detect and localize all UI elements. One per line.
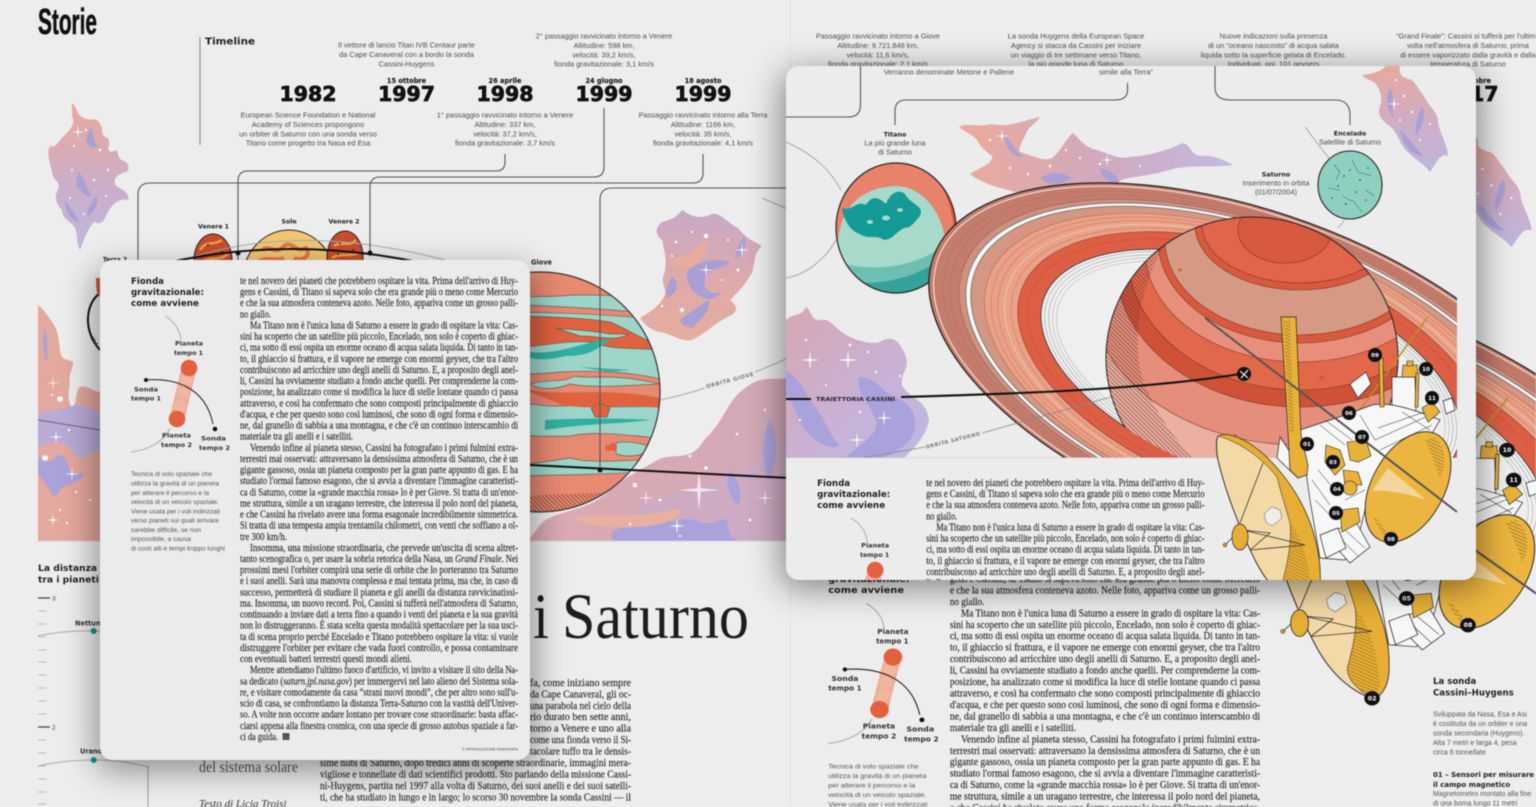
numbered markers: [1298, 348, 1439, 617]
article body text: gigante gassoso, ossia un pianeta composto per la gran parte appunto di gas. E ha: [240, 465, 518, 476]
panel: card 1 article: [100, 260, 530, 760]
panel: right magazine page: [790, 0, 1536, 807]
article body text: materiale tra gli anelli e i satelliti.: [240, 432, 353, 443]
sidebar: gravity assist: [131, 277, 230, 552]
article intro column: vigliose e tonnellate di dati scientifici prodotti. Sto parlando della missione Cassi-: [320, 770, 631, 780]
trajectory Cassini: [786, 367, 1251, 403]
distance scale: 3: [52, 596, 56, 602]
timeline captions right page: di essere vaporizzato dalla gravità e dalla: [1400, 50, 1536, 60]
article body text: e che Cassini ha rivelato avere una forma esagonale incredibilmente simmetrica.: [240, 510, 518, 520]
article body text: ci, ma sotto di essi ospita un enorme oceano di acqua salata liquida. Di tanto in tan-: [240, 343, 518, 354]
article intro column: tacolare tuffo tra le densis-: [530, 746, 631, 758]
sidebar paragraph: utilizza la gravità di un pianeta: [131, 480, 220, 488]
sidebar paragraph: sarebbe difficile, se non: [131, 527, 202, 534]
timeline captions bottom row: Academy of Sciences propongono: [252, 120, 364, 129]
timeline captions top row: da Cape Canaveral con a bordo la sonda: [339, 50, 475, 59]
numbered markers: 02: [1301, 608, 1309, 614]
shadow of card 1: [96, 270, 534, 770]
article body text: continuando a inviare dati a terra fino a quando i venti del pianeta e la sua gravità: [240, 610, 518, 621]
distance scale: Urano: [80, 748, 103, 756]
diagram: flyby: Sonda: [201, 434, 226, 442]
timeline captions right page: un viaggio di tre settimane verso Titano,: [1011, 50, 1141, 60]
sidebar: La sonda Cassini-Huygens: è costituita da un orbiter e una: [1433, 721, 1527, 728]
timeline captions right page: velocità: 11,6 km/s,: [847, 50, 909, 60]
dish left: [1216, 435, 1320, 610]
timeline captions right page: “Grand Finale”: Cassini si tufferà per l'ultima: [1396, 32, 1536, 40]
timeline captions bottom row: Altitudine: 1166 km,: [671, 120, 735, 129]
timeline captions top row: Cassini-Huygens: [379, 60, 435, 68]
timeline captions bottom row: fionda gravitazionale: 3,7 km/s: [455, 138, 555, 148]
numbered markers: 03: [1329, 460, 1337, 466]
diagram: flyby: tempo 1: [174, 349, 203, 357]
article body text: to, il ghiaccio si frattura, e il vapore ne emerge con enormi geyser, che tra l'altro: [240, 354, 518, 365]
sidebar heading: [131, 277, 204, 309]
article body text: attraverso, e così ha confermato che sono composti principalmente di ghiaccio: [240, 398, 518, 409]
timeline dates: 15 ottobre: [387, 77, 427, 85]
labels Titano, Encelado, Saturno: di Saturno: [878, 148, 912, 156]
gold parts of the spacecraft: [1325, 358, 1440, 532]
spacecraft Cassini-Huygens: [1205, 317, 1469, 617]
article body text: li, Cassini ha ovviamente studiato a fondo anche quelli. Per comprenderne la com-: [240, 376, 518, 387]
sidebar paragraph: per alterare il percorso e la: [131, 490, 210, 497]
planet: Sole: [246, 228, 328, 261]
sidebar heading: gravitazionale:: [131, 288, 204, 298]
orbit Saturno label: ORBITA SATURNO: [925, 431, 981, 451]
labels Titano, Encelado, Saturno: Encelado: [1334, 130, 1367, 138]
distance chart heading: [38, 563, 99, 586]
nebula: left flame: [48, 103, 129, 250]
planet labels: Sole: [281, 218, 297, 226]
spine: [790, 0, 791, 807]
article body text: non lo distruggeranno. È stata scelta questa modalità spettacolare per la sua usci-: [240, 620, 518, 632]
nebula: lower left: [786, 307, 929, 458]
sidebar: La sonda Cassini-Huygens: 01 – Sensori per misurare: [1433, 771, 1534, 779]
timeline years: 1999: [674, 82, 732, 106]
timeline captions right page: liquida sotto la superficie gelata di Encelado.: [1201, 50, 1346, 60]
article body text: contribuiscono ad arricchire uno degli anelli di Saturno. E, a proposito degli anel-: [240, 365, 518, 376]
illustration continuation behind card: [1475, 138, 1536, 538]
timeline captions bottom row: European Science Foundation e National: [241, 110, 376, 120]
numbered markers: 08: [1387, 537, 1395, 543]
timeline captions bottom row: [239, 110, 768, 148]
labels Titano, Encelado, Saturno: [864, 130, 1381, 196]
article intro column: sime nubi di Saturno, dopo tredici anni di scoperte straordinarie, immagini mera-: [320, 758, 631, 769]
timeline years: 1997: [378, 82, 435, 106]
subtitle and author: del sistema solare: [199, 759, 298, 776]
date 2017: 15 settembre: [1441, 77, 1492, 85]
timeline captions bottom row: Titano come progetto tra Nasa ed Esa: [246, 138, 371, 148]
diagram: flyby: tempo 2: [161, 441, 192, 449]
panel: card 2 Saturn illustration: [786, 66, 1536, 807]
article body text: Ma Titano non è l'unica luna di Saturno a essere in grado di ospitare la vita: Cas-: [250, 320, 518, 332]
timeline captions top row: Il vettore di lancio Titan IVB Centaur parte: [338, 40, 475, 50]
moon: Titano: [830, 160, 962, 300]
orbit Giove label: ORBITA GIOVE: [706, 372, 755, 390]
article intro column: da Cape Canaveral, gli oc-: [530, 690, 631, 700]
timeline captions top row: Altitudine: 598 km,: [574, 41, 634, 50]
article body text: con eventuali batteri terrestri questi mondi alieni.: [240, 654, 412, 665]
article repeated in card: [817, 478, 1205, 807]
timeline heading: Timeline: [205, 36, 255, 48]
article body text: gens e Cassini, di Titano si sapeva solo che era grande più o meno come Mercurio: [240, 287, 518, 298]
planet: Saturno with rings: [879, 106, 1536, 640]
numbered markers: 06: [1345, 411, 1353, 417]
date 2017: 2017: [1442, 82, 1498, 106]
moon: Encelado: [1318, 151, 1382, 219]
sidebar heading: come avviene: [131, 299, 199, 309]
timeline captions bottom row: fionda gravitazionale: 4,1 km/s: [653, 138, 753, 148]
article intro column: come una fionda verso il Si-: [530, 735, 631, 746]
sidebar: La sonda Cassini-Huygens: circa 6 tonnellate: [1433, 750, 1486, 756]
timeline captions top row: 2° passaggio ravvicinato intorno a Venere: [536, 32, 672, 40]
sidebar: La sonda Cassini-Huygens: Cassini–Huygens: [1433, 688, 1514, 698]
planet: Giove: [529, 258, 662, 514]
diagram: flyby: Sonda: [134, 386, 158, 394]
timeline dates: 26 aprile: [489, 77, 522, 85]
article body text: successo, permetterà di studiare il pianeta e gli anelli da distanza ravvicinatissi-: [240, 587, 518, 598]
title fragment: Saturno: [562, 581, 749, 653]
timeline captions top row: [338, 32, 672, 68]
timeline heading: [200, 36, 255, 145]
timeline captions right page: di un “oceano nascosto” di acqua salata: [1208, 41, 1340, 50]
timeline dates: 24 giugno: [585, 77, 623, 85]
article body text: Mentre attendiamo l'ultimo fuoco d'artificio, vi invito a visitare il sito della Na-: [250, 665, 518, 676]
article body text: ca di Saturno, come la «grande macchia rossa» lo è per Giove. Si tratta di un'enor-: [240, 487, 518, 498]
planet labels: Terra 2: [103, 256, 127, 264]
planet labels: [103, 218, 359, 264]
trajectory Cassini: TRAIETTORIA CASSINI: [816, 397, 895, 403]
article body text: me struttura, simile a un uragano terrestre, che interessa il polo nord del pianeta,: [240, 498, 518, 509]
article body text: ciarsi appena alla finestra cosmica, con una specie di grosso autobus spaziale a far-: [240, 721, 518, 732]
rings: [879, 106, 1536, 640]
title fragment: i: [533, 581, 549, 653]
article body text: ne, dal granello di sabbia a una montagna, e che c'è un continuo interscambio di: [240, 421, 518, 432]
timeline captions right page: Agency si stacca da Cassini per iniziare: [1011, 41, 1141, 50]
timeline captions bottom row: 1° passaggio ravvicinato intorno a Venere: [437, 110, 573, 120]
article body text: ta di scena proprio perché Encelado e Titano potrebbero ospitare la vita: si vuole: [240, 632, 518, 643]
numbered markers: 09: [1371, 353, 1379, 359]
labels Titano, Encelado, Saturno: Titano: [884, 130, 907, 138]
article body text: studiato l'ormai famoso esagono, che si avvia a diventare l'immagine caratteristi-: [240, 476, 518, 487]
article body text: d'acqua, e che per questo sono così luminosi, che sono di ogni forma e dimensio-: [240, 409, 518, 420]
illustration group: [786, 66, 1536, 640]
numbered markers: 10: [1422, 367, 1430, 373]
title fragment: [534, 594, 748, 640]
timeline captions right page: fionda gravitazionale: 2,1 km/s: [828, 60, 928, 68]
timeline captions right page: Individuati, poi, 101 geysers: [1228, 60, 1320, 68]
sidebar: La sonda Cassini-Huygens: Alta 7 metri e larga 4, pesa: [1433, 740, 1517, 747]
sidebar paragraph: [131, 471, 225, 552]
timeline years: 1999: [576, 82, 632, 106]
sidebar: La sonda Cassini-Huygens: [1433, 677, 1534, 807]
long grey rod: [1205, 318, 1457, 512]
article body text: e che la sua atmosfera conteneva azoto. Nelle foto, appariva come un grosso palli-: [240, 298, 518, 309]
nebula: upper right: [1362, 66, 1448, 172]
boom yellow: [1281, 317, 1308, 478]
article body text: prossimi mesi l'orbiter compirà una serie di orbite che lo porteranno tra Saturno: [240, 565, 518, 576]
captions fragments at top of card: simile alla Terra”: [1099, 68, 1153, 76]
article body text: Venendo infine al pianeta stesso, Cassini ha fotografato i primi fulmini extra-: [250, 443, 518, 454]
planet labels: Venere 1: [198, 224, 229, 230]
diagram: flyby: tempo 1: [131, 394, 161, 402]
labels Titano, Encelado, Saturno: Saturno: [1262, 170, 1291, 178]
article intro column: rio durato ben sette anni,: [530, 712, 631, 723]
article intro column: ti, che ha studiato in lungo e in largo; lo scorso 30 novembre la sonda Cassini — il: [320, 792, 631, 804]
timeline captions bottom row: velocità: 37,2 km/s,: [473, 130, 537, 138]
timeline captions right page: Passaggio ravvicinato intorno a Giove: [816, 32, 940, 40]
timeline captions bottom row: un orbiter di Saturno con una sonda verso: [239, 130, 377, 138]
timeline captions bottom row: Passaggio ravvicinato intorno alla Terra: [639, 110, 768, 120]
numbered markers: 01: [1303, 442, 1311, 448]
connector lines: [786, 66, 1350, 125]
captions fragments at top of card: Verranno denominate Metone e Pallene: [884, 68, 1014, 76]
article body text: no giallo.: [240, 309, 271, 320]
sidebar paragraph: di costi alti e tempi troppo lunghi: [131, 546, 225, 552]
numbered markers: 07: [1358, 435, 1366, 441]
timeline connector lines: [138, 108, 790, 470]
article body text: posizione, ha analizzato come si modifica la luce di stelle lontane quando ci passa: [240, 387, 518, 398]
moon orbit lines: [786, 127, 1344, 278]
numbered markers: 04: [1333, 487, 1341, 493]
article body text: sini ha scoperto che un satellite più piccolo, Encelado, non solo è coperto di ghiac-: [240, 332, 518, 343]
timeline captions bottom row: velocità: 35 km/s,: [674, 130, 732, 138]
dish right: [1347, 417, 1469, 557]
article body text: e i suoi anelli. Sarà una manovra complessa e mai tentata prima, ma che, in caso di: [240, 576, 518, 587]
copyright note: © RIPRODUZIONE RISERVATA: [462, 746, 518, 752]
trajectory Cassini: [236, 250, 790, 478]
orbit Giove label: [660, 198, 790, 400]
distance chart heading: La distanza: [38, 563, 97, 574]
labels Titano, Encelado, Saturno: (01/07/2004): [1255, 188, 1297, 196]
heading: Storie: Storie: [38, 1, 97, 42]
shadow of card 2: [782, 72, 1480, 588]
subtitle and author: [199, 759, 298, 807]
article body text: distruggere l'orbiter per evitare che vada fuori controllo, e possa contaminare: [240, 643, 518, 654]
article intro column: fa, come iniziano sempre: [530, 678, 632, 689]
timeline captions right page: temperatura di Saturno: [1430, 60, 1506, 68]
article body text: re, e visitare comodamente da casa “strani nuovi mondi”, che per altro sono sull'u-: [240, 687, 518, 698]
article body text: sa dedicato (saturn.jpl.nasa.gov) per immergervi nel lato alieno del Sistema sola-: [240, 676, 518, 687]
timeline captions top row: velocità: 39,2 km/s,: [572, 50, 636, 60]
diagram: flyby: Pianeta: [175, 340, 203, 348]
timeline captions right page: la più grande luna di Saturno: [1029, 60, 1123, 68]
article body text: tre 300 km/h.: [240, 532, 287, 543]
sidebar paragraph: Viene usata per i voli indirizzati: [131, 508, 220, 515]
distance chart heading: tra i pianeti: [38, 574, 99, 586]
sidebar: La sonda Cassini-Huygens: Magnetometro montato alla fine: [1433, 791, 1532, 798]
captions fragments at top of card: [884, 68, 1153, 76]
timeline captions right page: Nuove indicazioni sulla presenza: [1220, 32, 1328, 40]
sidebar paragraph: impossibile, a causa: [131, 536, 192, 543]
timeline captions top row: fionda gravitazionale: 3,1 km/s: [554, 60, 654, 68]
timeline years: [280, 84, 732, 102]
orbits around the sun: [88, 240, 445, 350]
illustration base line: [38, 540, 790, 542]
sidebar: La sonda Cassini-Huygens: sonda secondaria (Huygens).: [1433, 730, 1524, 738]
timeline captions right page: volta nell'atmosfera di Saturno, prima: [1407, 41, 1530, 50]
timeline captions right page: La sonda Huygens della European Space: [1008, 32, 1144, 40]
planet body bands: [1090, 117, 1510, 510]
article body text: so. A volte non occorre andare lontano per trovare cose straordinarie: basta affac-: [240, 710, 518, 721]
article body text: scio di casa, se confrontiamo la distanza Terra-Saturno con la vastità dell'Univer-: [240, 699, 518, 710]
timeline captions right page: Altitudine: 9.721.846 km,: [837, 41, 919, 50]
diagram: flyby: Pianeta: [162, 432, 191, 440]
labels Titano, Encelado, Saturno: Satellite di Saturno: [1319, 138, 1381, 146]
nebula: lower band and left strip: [38, 305, 790, 541]
sidebar: La sonda Cassini-Huygens: il campo magnetico: [1433, 781, 1510, 789]
sidebar paragraph: Tecnica di volo spaziale che: [131, 471, 213, 478]
article body text: Insomma, una missione straordinaria, che prevede un'uscita di scena altret-: [250, 543, 518, 554]
planet: Giove: Giove: [531, 258, 553, 266]
article repeated on right page: [828, 562, 1261, 807]
spacecraft continuation behind card: [1261, 397, 1536, 706]
article intro column: [320, 678, 632, 804]
panel: left magazine page: [38, 1, 790, 807]
diagram: flyby: tempo 2: [199, 444, 230, 452]
article body text: tanto scenografica o, per usare la sobria retorica della Nasa, un Grand Finale. Nei: [240, 554, 518, 565]
labels Titano, Encelado, Saturno: Inserimento in orbita: [1243, 178, 1310, 188]
timeline dates: 18 agosto: [685, 77, 722, 85]
article body text: ci da guida.: [240, 732, 278, 743]
nebula: upper right flame: [640, 210, 762, 340]
article intro column: torno a Venere e uno alla: [530, 724, 632, 734]
planet: Venere 2: [326, 230, 364, 261]
article content: [131, 276, 518, 743]
article intro column: una parabola nel cielo della: [530, 701, 632, 712]
planet labels: Venere 2: [329, 218, 359, 226]
sidebar heading: Fionda: [131, 277, 164, 287]
numbered markers: 05: [1332, 511, 1340, 517]
distance scale: 2: [52, 724, 56, 732]
numbered markers: 11: [1428, 396, 1436, 402]
article body text: te nel novero dei pianeti che potrebbero ospitare la vita. Prima dell'arrivo di Huy-: [240, 276, 518, 287]
article body text: ma. Insomma, un nuovo record. Poi, Cassini si tufferà nell'atmosfera di Saturno,: [240, 598, 518, 610]
diagram: flyby: [131, 316, 230, 452]
timeline years: 1998: [476, 82, 534, 106]
timeline captions right page: [816, 32, 1536, 68]
planet: Venere 1: [192, 232, 234, 261]
orbit Saturno label: [862, 397, 1111, 458]
date 2017: [1475, 76, 1498, 102]
timeline years: 1982: [280, 82, 336, 106]
timeline captions bottom row: Altitudine: 337 km,: [475, 120, 535, 129]
article body text: Si tratta di una tempesta ampia trentamila chilometri, con venti che soffiano a ol-: [240, 521, 518, 532]
nebula: long central flame: [959, 117, 1233, 200]
article intro column: ni-Huygens, partita nel 1997 alla volta di Saturno, dei suoi anelli e dei suoi satelli-: [320, 781, 631, 792]
sidebar: La sonda Cassini-Huygens: La sonda: [1433, 677, 1477, 687]
article body text: terrestri mai osservati: attraversano la densissima atmosfera di Saturno, che è un: [240, 454, 518, 465]
sidebar paragraph: verso pianeti sui quali arrivare: [131, 518, 220, 524]
thin gold rod: [1343, 318, 1427, 433]
distance scale: [38, 596, 148, 807]
sidebar: La sonda Cassini-Huygens: Sviluppata da Nasa, Esa e Asi: [1433, 712, 1527, 718]
sidebar paragraph: velocità di un veicolo spaziale.: [131, 499, 219, 506]
labels Titano, Encelado, Saturno: La più grande luna: [864, 138, 927, 148]
article body text: [240, 276, 518, 743]
timeline dates: [387, 77, 722, 85]
white body of the spacecraft: [1277, 372, 1455, 563]
trajectory fragment label: TRA: [88, 336, 99, 348]
distance scale: Nettuno: [75, 620, 106, 628]
